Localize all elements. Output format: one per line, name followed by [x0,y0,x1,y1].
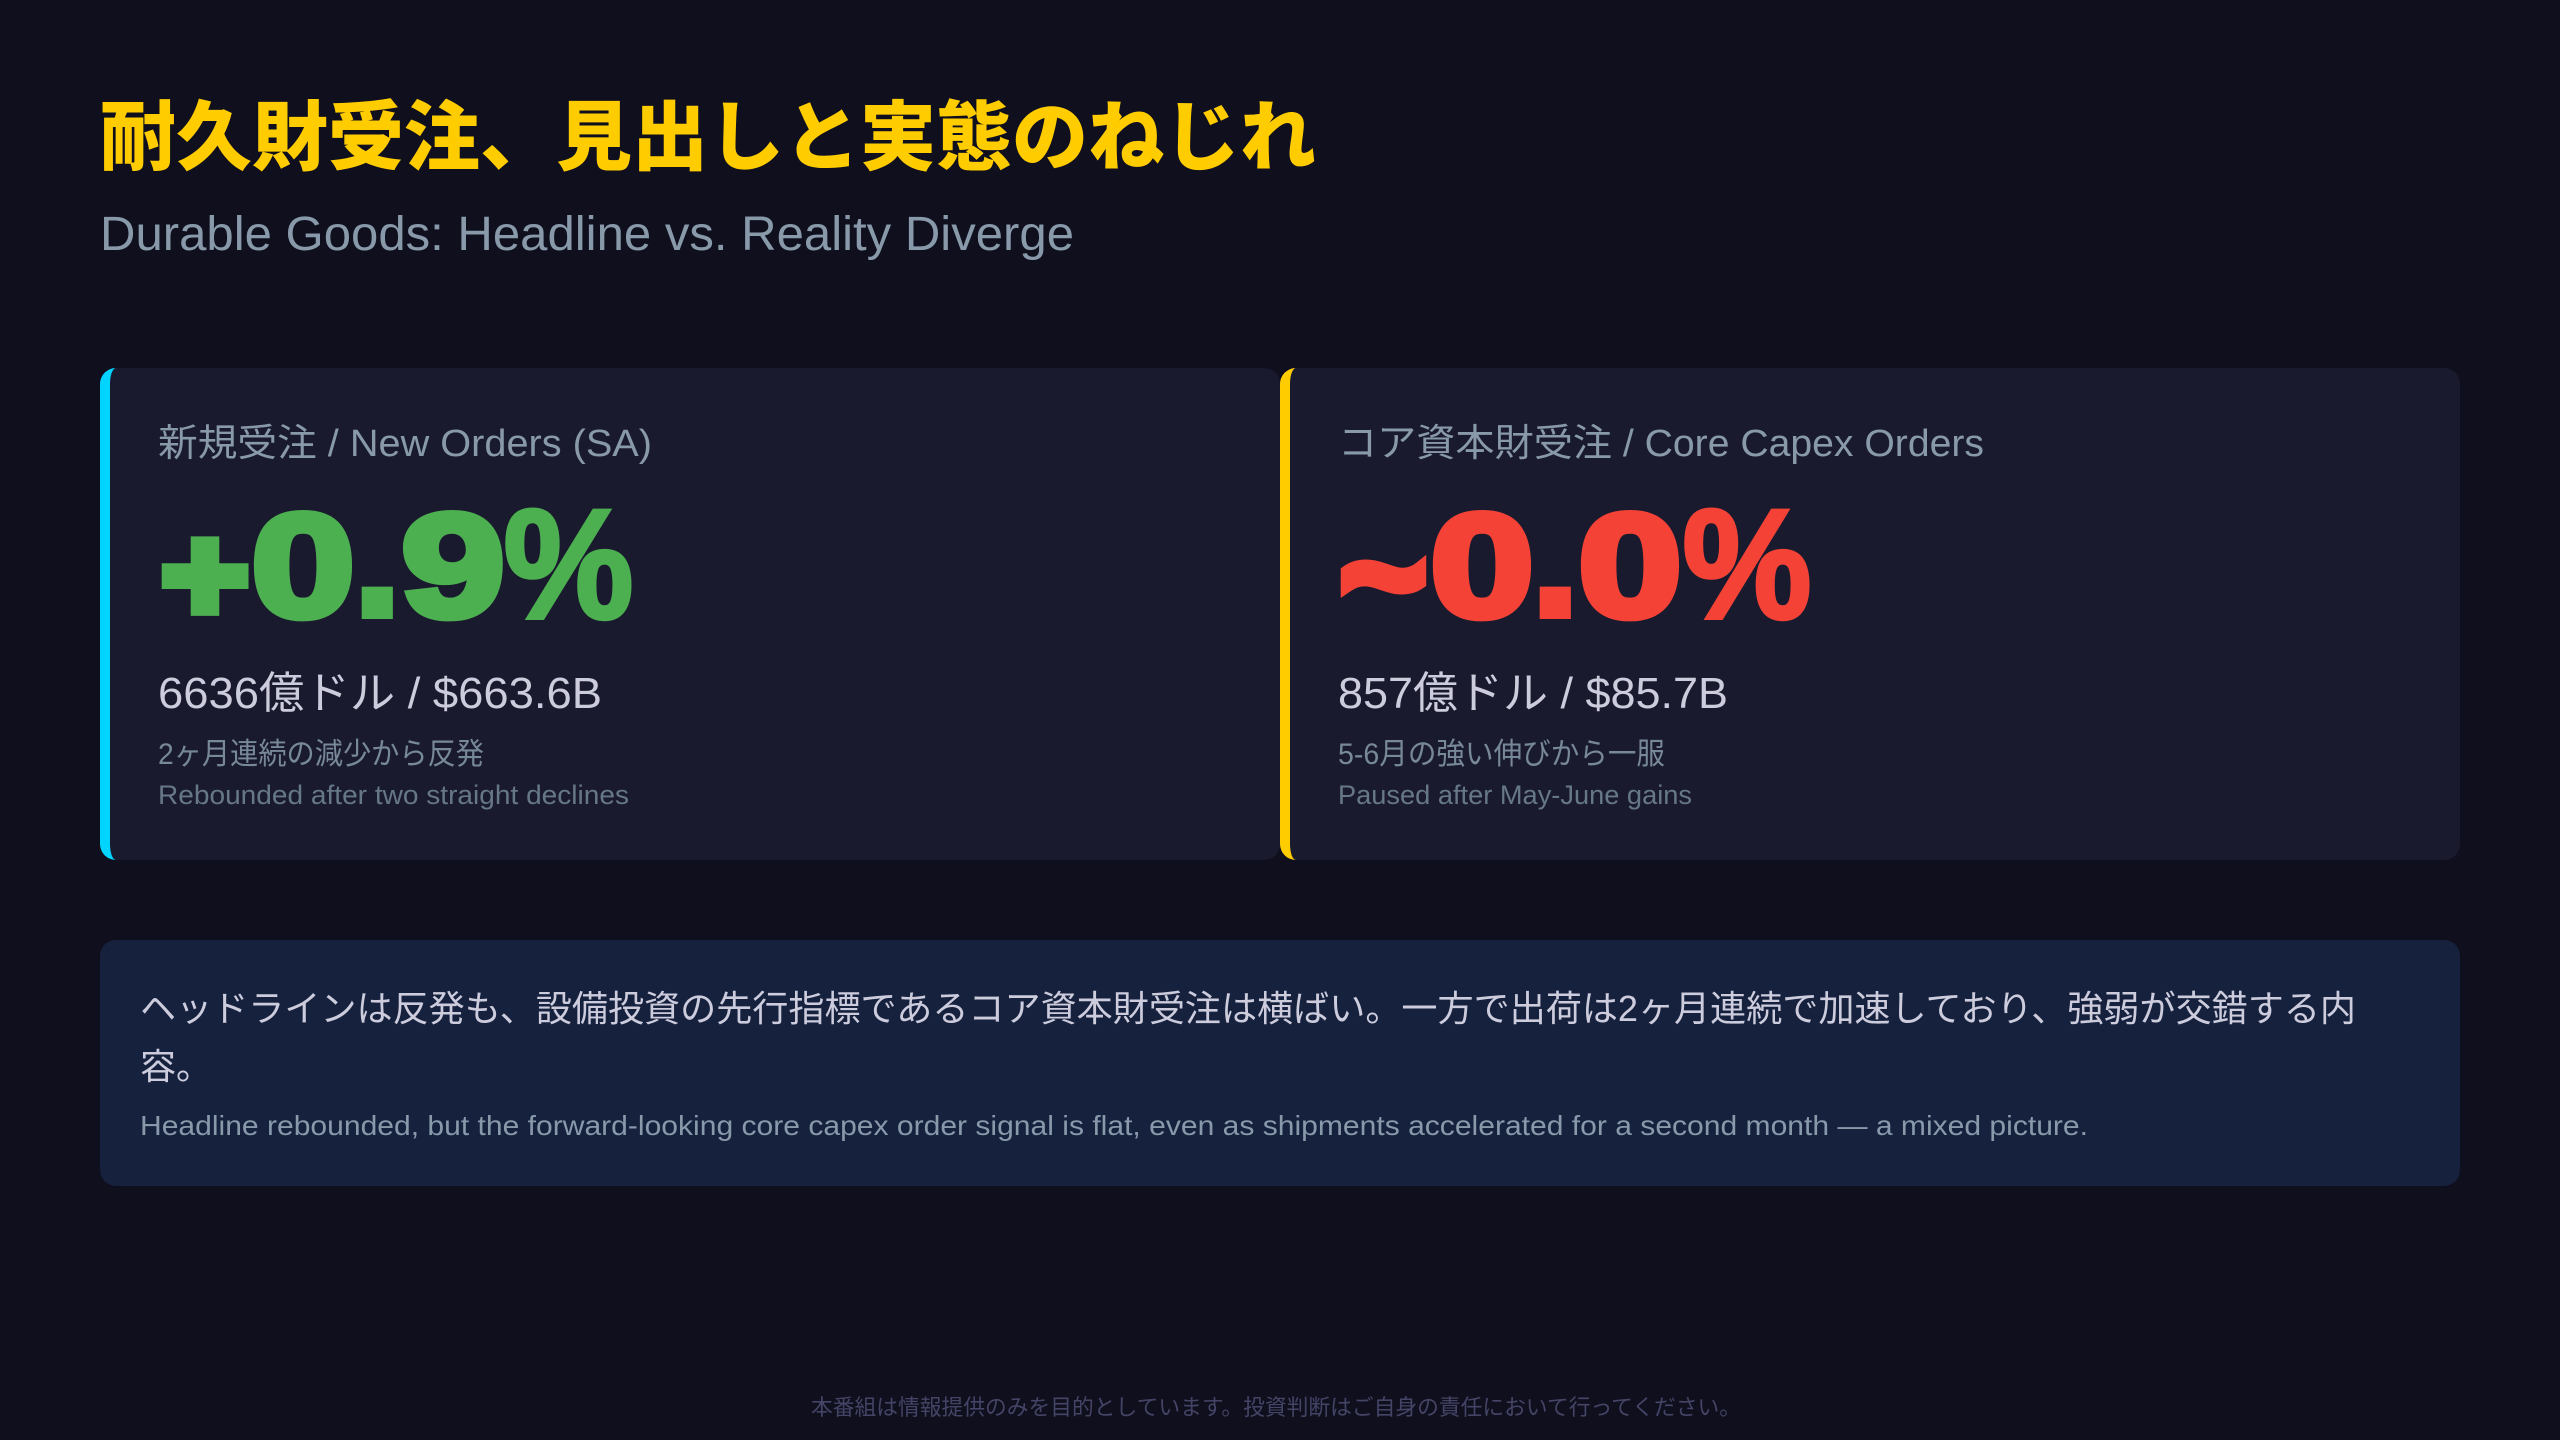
header: title and subtitle [100,96,1316,261]
note in Japanese: 2ヶ月連続の減少から反発 [158,738,484,771]
summary in Japanese [140,988,2356,1087]
title: 耐久財受注、見出しと実態のねじれ [100,96,1316,181]
big number: ~0.0%: 0 [1579,484,1682,647]
note in Japanese: 5-6月の強い伸びから一服 [1338,738,1665,771]
big number: ~0.0%: 0 [1431,484,1534,647]
big number: +0.9%: . [356,478,398,646]
big number: +0.9%: 0 [252,484,355,647]
panel: summary callout [100,940,2460,1186]
amount: 6636億ドル / $663.6B [158,669,602,718]
big number: +0.9% [162,478,634,652]
big number: ~0.0% [1341,478,1812,656]
summary in Japanese: 容。 [140,1046,212,1087]
big number: +0.9%: 9 [402,484,505,647]
big number: +0.9%: % [504,478,634,652]
panel: new orders [100,368,1280,860]
big number: ~0.0%: % [1682,478,1812,652]
card label: 新規受注 / New Orders (SA) [158,423,652,465]
big number: ~0.0%: . [1534,478,1576,646]
card label: コア資本財受注 / Core Capex Orders [1338,423,1984,465]
subtitle: Durable Goods: Headline vs. Reality Diverge [100,208,1074,261]
big number: ~0.0%: ~ [1341,494,1426,656]
note in English: Paused after May-June gains [1338,780,1692,810]
summary in English: Headline rebounded, but the forward-looking core capex order signal is flat, even as shipments accelerated for a second month — a mixed picture. [140,1110,2088,1141]
big number: +0.9%: + [162,499,248,650]
amount: 857億ドル / $85.7B [1338,669,1728,718]
panel: core capex orders [1280,368,2460,860]
footer disclaimer: 本番組は情報提供のみを目的としています。投資判断はご自身の責任において行ってください。 [811,1395,1741,1420]
summary in Japanese: ヘッドラインは反発も、設備投資の先行指標であるコア資本財受注は横ばい。一方で出荷は2ヶ月連続で加速しており、強弱が交錯する内 [140,988,2356,1029]
note in English: Rebounded after two straight declines [158,780,629,810]
